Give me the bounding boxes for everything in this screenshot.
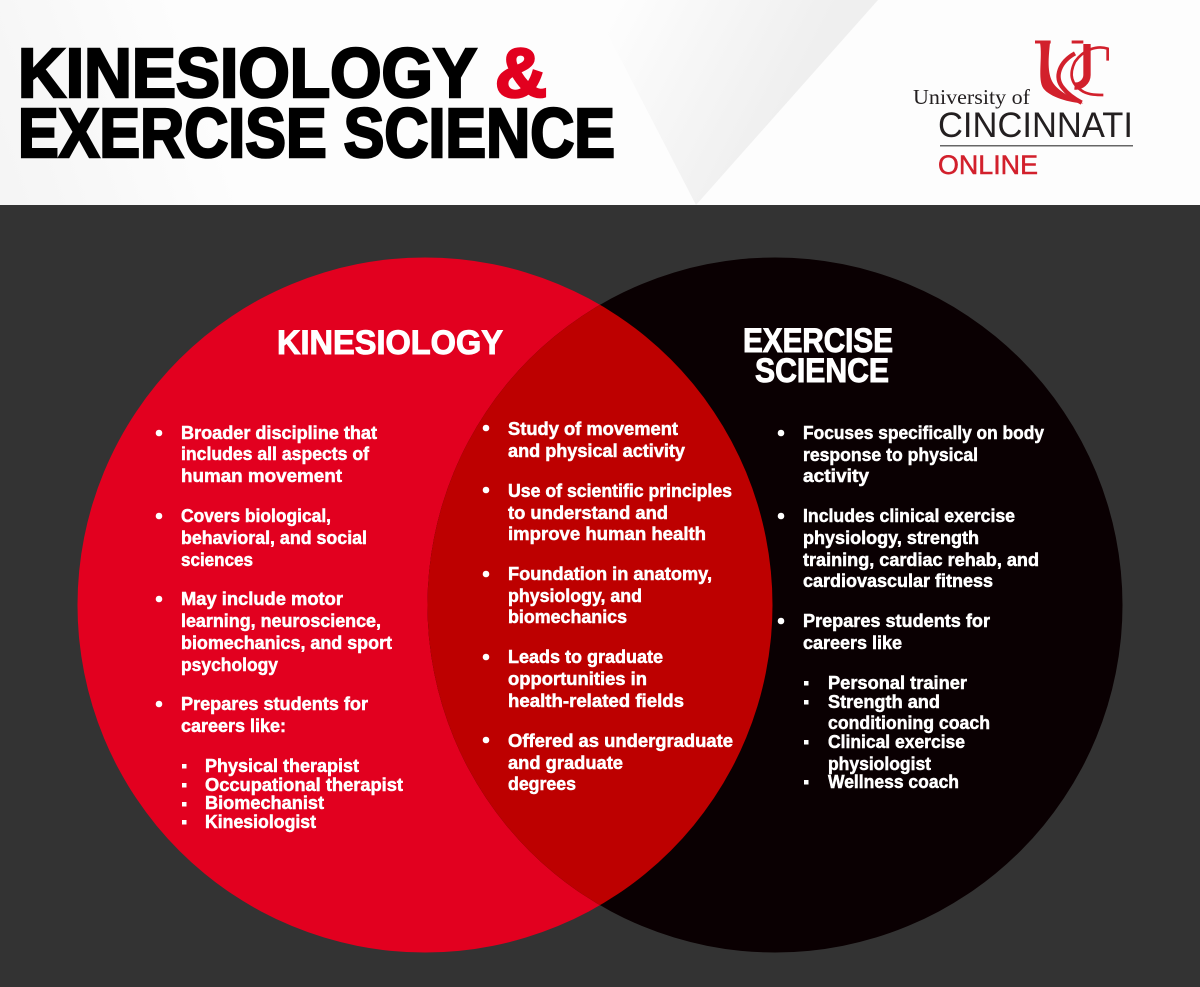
panel: kinesiology list: Physical therapist (205, 756, 359, 776)
panel: shared list: Offered as undergraduate (508, 731, 733, 751)
panel: exercise science list: physiologist (828, 754, 931, 774)
circle: kinesiology (78, 258, 772, 952)
panel: exercise science list: Focuses specifically on body (803, 423, 1044, 443)
panel: shared list (483, 419, 733, 794)
panel: kinesiology list: psychology (181, 655, 278, 675)
panel: shared list: to understand and (508, 503, 668, 523)
panel: kinesiology list: behavioral, and social (181, 528, 367, 548)
panel: kinesiology list: Biomechanist (205, 793, 324, 813)
panel: exercise science list: Strength and (828, 692, 940, 712)
panel: shared list: and graduate (508, 753, 623, 773)
panel: kinesiology list: May include motor (181, 589, 343, 609)
logo text: University of: University of (913, 85, 1030, 109)
panel: exercise science list: Clinical exercise (828, 732, 965, 752)
panel: exercise science list: response to physical (803, 445, 978, 465)
panel: kinesiology list: careers like: (181, 716, 286, 736)
panel: exercise science list: careers like (803, 633, 902, 653)
panel: shared list: Use of scientific principles (508, 481, 732, 501)
panel: exercise science list: Wellness coach (828, 772, 959, 792)
panel: shared list: biomechanics (508, 607, 627, 627)
icon: UC monogram (1035, 42, 1108, 103)
panel: shared list: physiology, and (508, 586, 642, 606)
panel: shared list: Leads to graduate (508, 647, 663, 667)
panel: shared list: health-related fields (508, 691, 684, 711)
panel: kinesiology list: biomechanics, and sport (181, 633, 392, 653)
title: KINESIOLOGY (18, 34, 477, 112)
panel: shared list: improve human health (508, 524, 706, 544)
logo text: Cincinnati: CINCINNATI (938, 106, 1133, 145)
panel: kinesiology list: Occupational therapist (205, 775, 403, 795)
panel: exercise science list (778, 423, 1044, 792)
panel: exercise science list: Includes clinical exercise (803, 506, 1015, 526)
panel: exercise science list: cardiovascular fitness (803, 571, 993, 591)
header band (0, 0, 1200, 205)
panel: exercise science list: Personal trainer (828, 673, 967, 693)
panel: shared list: degrees (508, 774, 576, 794)
overlap region (428, 304, 772, 905)
panel: kinesiology list: Covers biological, (181, 506, 331, 526)
university logo (913, 42, 1133, 180)
panel: kinesiology list: includes all aspects of (181, 444, 370, 464)
panel: kinesiology list: human movement (181, 466, 342, 486)
panel: kinesiology list: sciences (181, 550, 253, 570)
panel: kinesiology list: Broader discipline that (181, 423, 377, 443)
panel: kinesiology list: learning, neuroscience, (181, 611, 381, 631)
panel: shared list: opportunities in (508, 669, 647, 689)
heading: kinesiology: KINESIOLOGY (277, 324, 503, 362)
circle: exercise science (428, 258, 1122, 952)
panel: exercise science list: Prepares students for (803, 611, 990, 631)
panel: exercise science list: training, cardiac rehab, and (803, 550, 1039, 570)
panel: exercise science list: activity (803, 466, 869, 486)
logo text: Online: ONLINE (938, 150, 1038, 180)
panel: shared list: Study of movement (508, 419, 678, 439)
title (18, 34, 615, 172)
panel: shared list: and physical activity (508, 441, 685, 461)
heading: exercise science: SCIENCE (755, 352, 889, 390)
panel: kinesiology list (156, 423, 403, 832)
heading: exercise science: EXERCISE (743, 322, 893, 360)
panel: kinesiology list: Prepares students for (181, 694, 368, 714)
title: & (495, 34, 547, 112)
panel: kinesiology list: Kinesiologist (205, 812, 316, 832)
panel: exercise science list: conditioning coach (828, 713, 990, 733)
title: EXERCISE SCIENCE (18, 94, 615, 172)
panel: shared list: Foundation in anatomy, (508, 564, 712, 584)
heading: exercise science (743, 322, 893, 390)
venn diagram (78, 258, 1122, 952)
panel: exercise science list: physiology, strength (803, 528, 979, 548)
